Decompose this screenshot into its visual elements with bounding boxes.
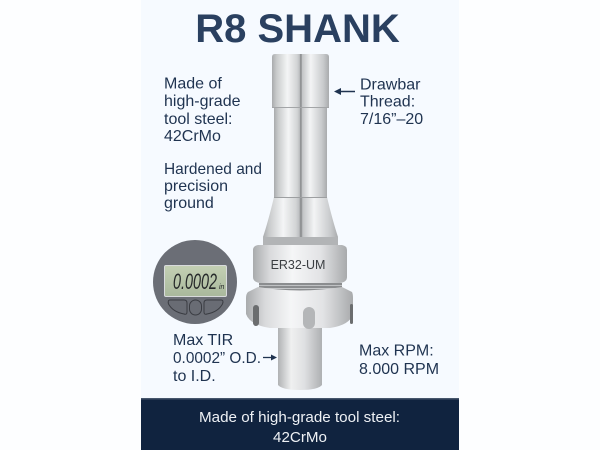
icon: digital gauge: [153, 240, 237, 324]
text block: material: Made of: [164, 76, 222, 92]
shank: cone: [263, 197, 338, 237]
caption bar: 42CrMo: [273, 429, 327, 446]
text block: material: high-grade: [164, 93, 241, 110]
text block: material: [164, 76, 241, 145]
shank: lower cylinder: [274, 107, 327, 197]
arrow: drawbar thread: [334, 88, 355, 95]
text block: drawbar thread: Drawbar: [360, 76, 421, 94]
text block: max TIR: [173, 332, 261, 385]
text block: max TIR: Max TIR: [173, 332, 233, 349]
gauge reading: 0.0002: [173, 269, 217, 294]
text block: drawbar thread: [360, 76, 423, 128]
collar: [253, 245, 347, 283]
text block: material: tool steel:: [164, 111, 232, 128]
shank: upper cylinder: [272, 54, 329, 107]
clamping nut: [246, 287, 353, 328]
arrow: max TIR: [263, 354, 277, 360]
caption bar: [141, 398, 459, 450]
text block: max TIR: 0.0002” O.D.: [173, 350, 261, 367]
text block: max RPM: Max RPM:: [359, 342, 434, 360]
panel: infographic background: [141, 0, 459, 398]
text block: max TIR: to I.D.: [173, 368, 216, 385]
gauge buttons: [168, 300, 223, 315]
lower shank: [278, 326, 322, 390]
text block: drawbar thread: 7/16”–20: [360, 111, 423, 128]
gauge unit: in: [219, 284, 225, 291]
thread: [259, 283, 342, 292]
text block: max RPM: 8.000 RPM: [359, 361, 439, 378]
text block: material: 42CrMo: [164, 128, 221, 145]
caption bar: Made of high-grade tool steel:: [199, 409, 400, 426]
text block: drawbar thread: Thread:: [360, 94, 415, 110]
illustration: ER32 collet chuck: [246, 54, 353, 390]
text block: hardening: Hardened and: [164, 161, 262, 178]
cone band: [263, 237, 338, 246]
gauge screen: [164, 266, 226, 296]
title: R8 SHANK: [195, 7, 400, 51]
text block: hardening: ground: [164, 195, 214, 212]
label: ER32-UM: ER32-UM: [271, 258, 325, 272]
text block: max RPM: [359, 342, 439, 378]
text block: hardening: precision: [164, 178, 228, 195]
nut slots: [253, 304, 353, 329]
text block: hardening: [164, 161, 262, 212]
